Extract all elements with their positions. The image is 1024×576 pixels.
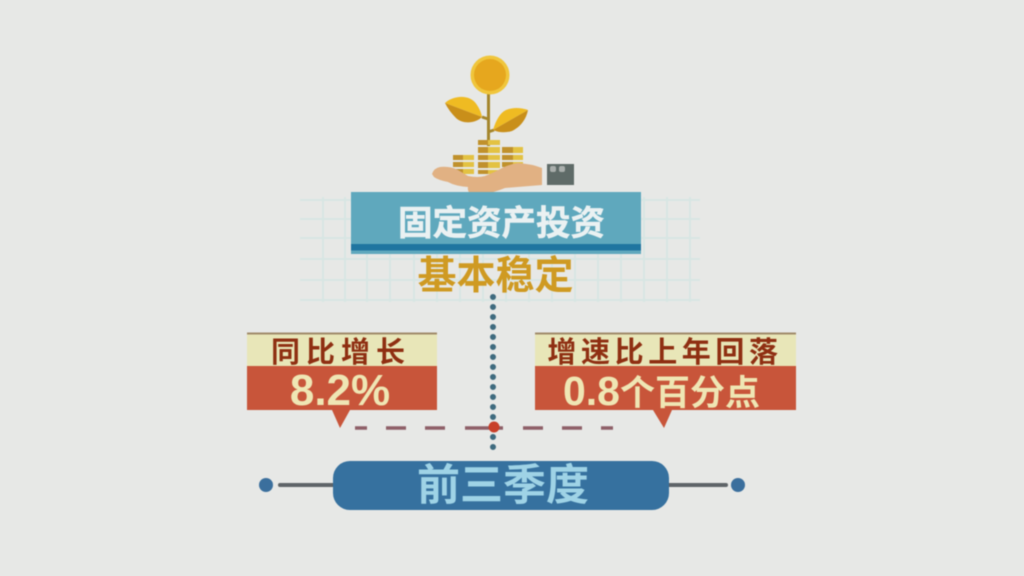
timeline marker: [488, 422, 500, 432]
decline label: 增速比上年回落: [547, 329, 783, 371]
period text: 前三季度: [417, 451, 589, 513]
dashed horizontal timeline: [355, 426, 613, 430]
panel: growth rate decline: [535, 329, 796, 428]
growth value: 8.2%: [290, 366, 390, 415]
growth label: 同比增长: [271, 329, 411, 371]
title banner: [351, 192, 641, 254]
panel: year-on-year growth: [247, 329, 437, 428]
time range connector left: [259, 478, 334, 492]
dotted vertical connector: [490, 297, 496, 450]
sleeve cuff: [547, 164, 574, 185]
gold coin flower: [470, 56, 510, 94]
right leaf: [493, 108, 528, 132]
plant stem: [482, 92, 494, 146]
hand: [432, 163, 542, 195]
subtitle: 基本稳定: [417, 245, 574, 301]
decline value: 0.8个百分点: [563, 368, 760, 414]
banner title text: 固定资产投资: [398, 195, 605, 245]
icon: money plant in hand: [432, 56, 574, 195]
coin stacks: [453, 140, 523, 174]
left leaf: [445, 97, 482, 122]
time period pill: [333, 451, 669, 513]
time range connector right: [668, 478, 745, 492]
